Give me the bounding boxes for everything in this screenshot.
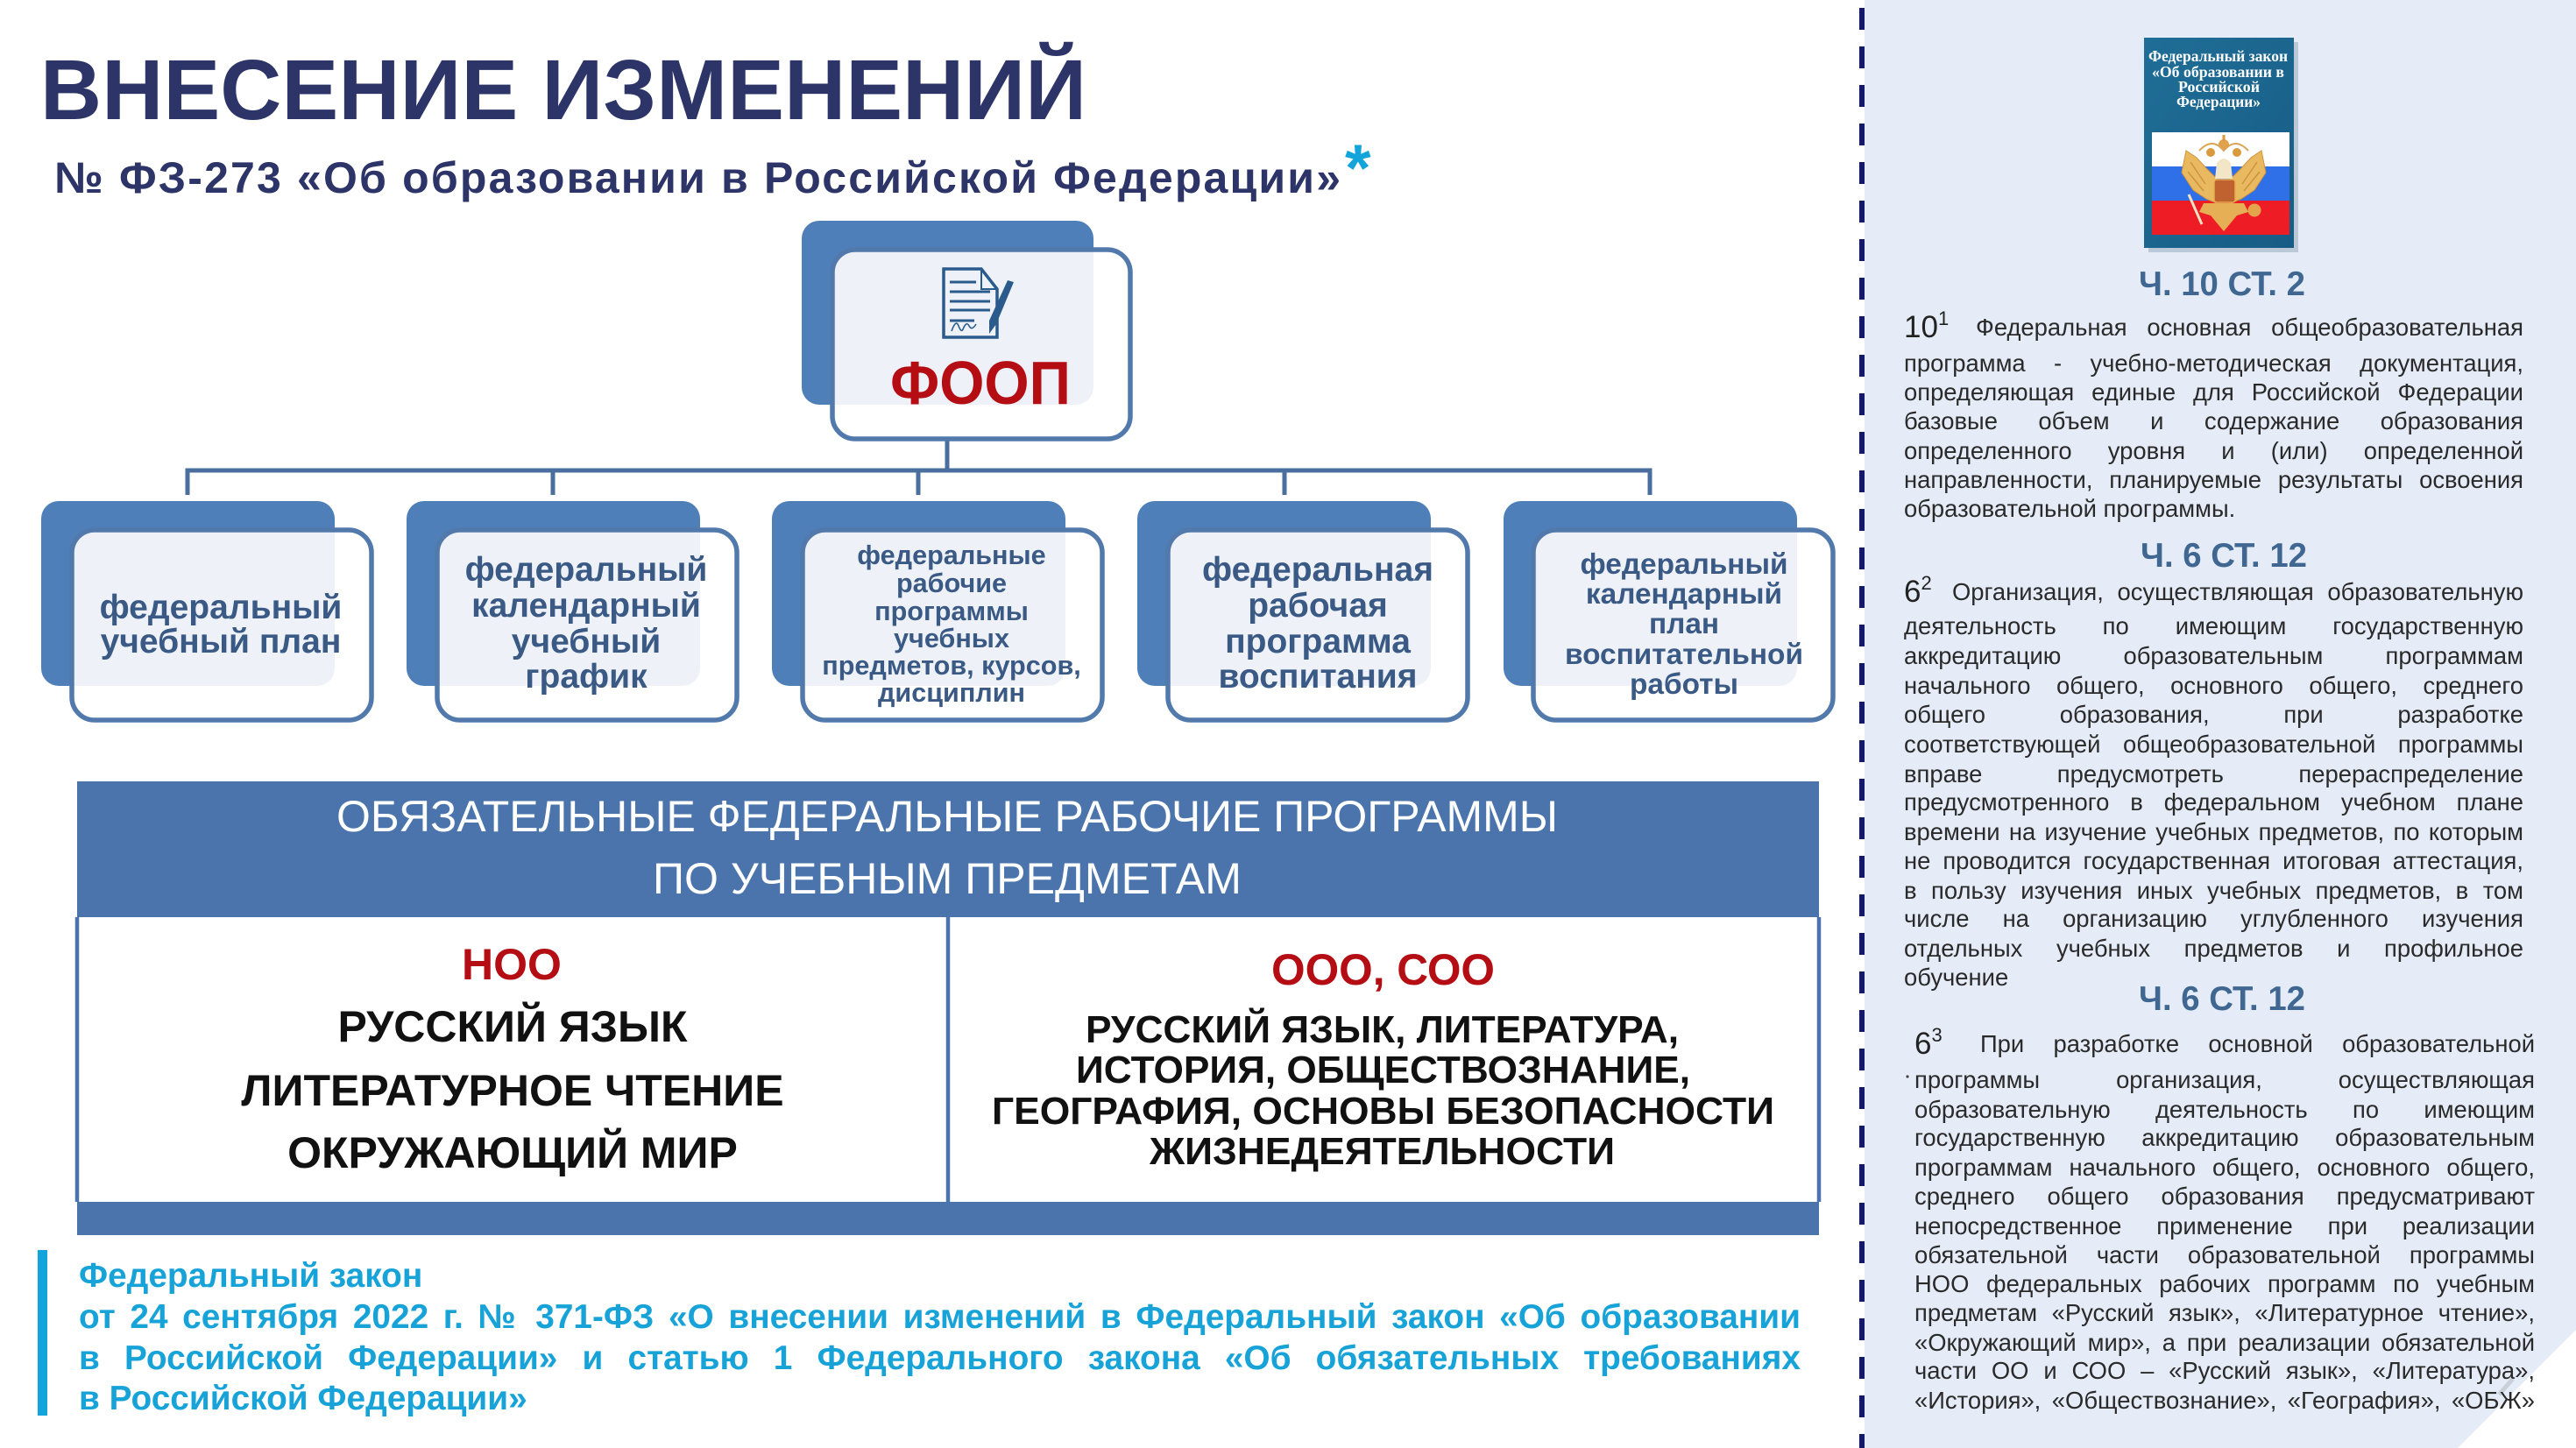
heading: Ч. 6 СТ. 12 (first): Ч. 6 СТ. 12 (2141, 537, 2307, 575)
text block: paragraph 6.3: части ОО и СОО – «Русский язык», «Литература», (1914, 1357, 2535, 1384)
cell: ООО, СОО: РУССКИЙ ЯЗЫК, ЛИТЕРАТУРА, (1086, 1007, 1679, 1051)
text block: paragraph 6.3: предметам «Русский язык», «Литературное чтение», (1914, 1299, 2535, 1326)
cell: ООО, СОО (992, 945, 1774, 1173)
text block: paragraph 6.2: в пользу изучения иных учебных предметов, в том (1904, 877, 2523, 904)
cell: НОО (241, 940, 784, 1177)
text block: paragraph 6.2: числе на организацию углубленного изучения (1904, 905, 2523, 932)
card: федеральные рабочие программы: рабочие (896, 569, 1007, 598)
card: федеральный календарный учебный график: учебный (512, 623, 661, 660)
text block: paragraph 10.1: определяющая единые для Российской Федерации (1904, 378, 2523, 406)
text block: paragraph 10.1: базовые объем и содержание образования (1904, 407, 2523, 434)
text block: paragraph 6.2: не проводится государственная итоговая аттестация, (1904, 847, 2523, 874)
table header: ОБЯЗАТЕЛЬНЫЕ ФЕДЕРАЛЬНЫЕ РАБОЧИЕ ПРОГРАММЫ (336, 792, 1558, 841)
text block: paragraph 10.1: программа - учебно-методическая документация, (1904, 350, 2523, 377)
card: федеральные рабочие программы: предметов, курсов, (822, 651, 1081, 681)
text block: paragraph 10.1: образовательной программы. (1904, 495, 2235, 522)
text block: paragraph 6.3: среднего общего образования предусматривают (1914, 1183, 2535, 1210)
cell: ООО, СОО: ЖИЗНЕДЕЯТЕЛЬНОСТИ (1149, 1130, 1615, 1173)
icon: document with pen (944, 269, 1014, 337)
card: федеральный календарный учебный график: график (525, 658, 648, 696)
icon: coat of arms (2182, 135, 2266, 231)
card: федеральная рабочая программа воспитания: федеральная (1202, 551, 1433, 589)
card: федеральные рабочие программы: федеральные (857, 540, 1046, 570)
card: федеральный календарный план воспитательной работы: федеральный (1580, 548, 1788, 581)
card: федеральная рабочая программа воспитания: программа (1225, 623, 1411, 660)
text block: paragraph 6.3: «История», «Обществознание», «География», «ОБЖ» (1914, 1387, 2535, 1414)
cell: НОО: РУССКИЙ ЯЗЫК (337, 1001, 688, 1051)
text block: paragraph 10.1 (1904, 307, 2523, 522)
cell: НОО: НОО (462, 940, 562, 989)
panel: right background (1865, 0, 2576, 1448)
text block: paragraph 6.2: аккредитацию образовательным программам (1904, 642, 2523, 669)
card: федеральный учебный план: учебный план (101, 623, 341, 660)
text block: paragraph 6.2 (1904, 572, 2523, 991)
text block: paragraph 6.2: 62 (1904, 572, 1932, 609)
table: mandatory programmes (77, 781, 1819, 1235)
table frame (77, 917, 1819, 1202)
text block: paragraph 6.3 (1914, 1024, 2535, 1414)
card: федеральные рабочие программы: учебных (894, 624, 1009, 653)
text block: paragraph 10.1: 101 (1904, 307, 1949, 344)
text block: paragraph 6.3: образовательную деятельность по имеющим (1914, 1096, 2535, 1123)
card: федеральный календарный план воспитательной работы: план (1649, 608, 1719, 640)
connector tree (188, 438, 1650, 495)
card: федеральные рабочие программы: программы (874, 597, 1029, 626)
text block: federal law reference: в Российской Федерации» (79, 1380, 527, 1417)
asterisk: * (1345, 131, 1371, 206)
icon: law book cover: Федеральный закон (2148, 47, 2288, 65)
text block: paragraph 6.2: предусмотренного в федеральном учебном плане (1904, 788, 2523, 816)
text block: federal law reference (79, 1257, 1801, 1417)
text block: paragraph 6.2: деятельность по имеющим государственную (1904, 612, 2523, 639)
text block: federal law reference: от 24 сентября 2022 г. № 371-ФЗ «О внесении изменений в Федеральный закон «Об образовании (79, 1298, 1801, 1336)
card: федеральные рабочие программы (772, 501, 1102, 720)
text block: paragraph 10.1: определенного уровня и (или) определенной (1904, 437, 2523, 464)
table header (77, 781, 1819, 917)
icon: law book cover: «Об образовании в (2152, 63, 2284, 81)
card: федеральный календарный план воспитательной работы: воспитательной (1565, 639, 1803, 671)
heading: Ч. 6 СТ. 12 (second): Ч. 6 СТ. 12 (2139, 980, 2305, 1018)
icon: law book cover (2144, 38, 2298, 252)
cell: ООО, СОО: ГЕОГРАФИЯ, ОСНОВЫ БЕЗОПАСНОСТИ (992, 1090, 1774, 1133)
table header: ПО УЧЕБНЫМ ПРЕДМЕТАМ (653, 854, 1242, 903)
heading: Ч. 10 СТ. 2: Ч. 10 СТ. 2 (2139, 265, 2305, 303)
text block: paragraph 6.2: соответствующей общеобразовательной программы (1904, 731, 2523, 758)
label: ФООП: ФООП (890, 349, 1071, 417)
card: федеральный учебный план: федеральный (100, 589, 342, 626)
card: федеральный учебный план (41, 501, 372, 720)
dashed vertical divider (1859, 8, 1865, 1448)
card: федеральный календарный план воспитательной работы (1504, 501, 1833, 720)
card: федеральный календарный план воспитательной работы: календарный (1586, 578, 1782, 611)
card: федеральный календарный учебный график (407, 501, 737, 720)
card: федеральная рабочая программа воспитания (1137, 501, 1468, 720)
text block: federal law reference: Федеральный закон (79, 1257, 422, 1295)
icon: law book cover: Российской (2178, 78, 2260, 95)
title: ВНЕСЕНИЕ ИЗМЕНЕНИЙ (40, 42, 1086, 138)
card: федеральная рабочая программа воспитания: воспитания (1218, 658, 1418, 696)
icon: law book cover: Федерации» (2176, 93, 2261, 110)
text block: paragraph 6.2: времени на изучение учебных предметов, по которым (1904, 818, 2523, 845)
card: федеральный календарный учебный график: федеральный (465, 551, 707, 589)
text block: paragraph 6.3: 63 (1914, 1024, 1943, 1061)
text block: paragraph 6.3: непосредственное применение при реализации (1914, 1212, 2535, 1240)
text block: paragraph 6.2: обучение (1904, 964, 2008, 991)
text block: paragraph 6.2: общего образования, при разработке (1904, 701, 2523, 728)
card: федеральный календарный план воспитательной работы: работы (1630, 668, 1738, 701)
text block: paragraph 6.3: обязательной части образовательной программы (1914, 1241, 2535, 1268)
text block: paragraph 6.3: НОО федеральных рабочих программ по учебным (1914, 1270, 2535, 1297)
text block: paragraph 6.2: отдельных учебных предметов и профильное (1904, 935, 2523, 962)
text block: paragraph 6.2: вправе предусмотреть перераспределение (1904, 760, 2523, 788)
text block: paragraph 10.1: Федеральная основная общеобразовательная (1976, 314, 2523, 341)
text block: paragraph 6.3: При разработке основной образовательной (1980, 1030, 2535, 1057)
cell: НОО: ОКРУЖАЮЩИЙ МИР (287, 1127, 738, 1177)
cell: ООО, СОО: ООО, СОО (1271, 945, 1495, 994)
card: ФООП (802, 221, 1130, 439)
text block: paragraph 6.2: Организация, осуществляющая образовательную (1952, 578, 2523, 605)
text block: paragraph 6.2: начального общего, основного общего, среднего (1904, 672, 2523, 699)
text block: paragraph 6.3: «Окружающий мир», а при реализации обязательной (1914, 1329, 2535, 1356)
card: федеральные рабочие программы: дисциплин (878, 678, 1025, 708)
text block: paragraph 6.3: программы организация, осуществляющая (1914, 1066, 2535, 1093)
card: федеральный календарный учебный график: календарный (471, 587, 701, 625)
law accent bar (38, 1250, 47, 1416)
text block: paragraph 10.1: направленности, планируемые результаты освоения (1904, 466, 2523, 493)
cell: ООО, СОО: ИСТОРИЯ, ОБЩЕСТВОЗНАНИЕ, (1076, 1049, 1690, 1091)
text block: paragraph 6.3: государственную аккредитацию образовательным (1914, 1124, 2535, 1151)
card: федеральная рабочая программа воспитания: рабочая (1248, 587, 1388, 625)
text block: federal law reference: в Российской Федерации» и статью 1 Федерального закона «Об обязательных требованиях (79, 1339, 1801, 1377)
text block: paragraph 6.3: программам начального общего, основного общего, (1914, 1154, 2535, 1181)
table bottom band (77, 1202, 1819, 1235)
subtitle: № ФЗ-273 «Об образовании в Российской Федерации» (54, 153, 1341, 202)
cell: НОО: ЛИТЕРАТУРНОЕ ЧТЕНИЕ (241, 1066, 784, 1115)
